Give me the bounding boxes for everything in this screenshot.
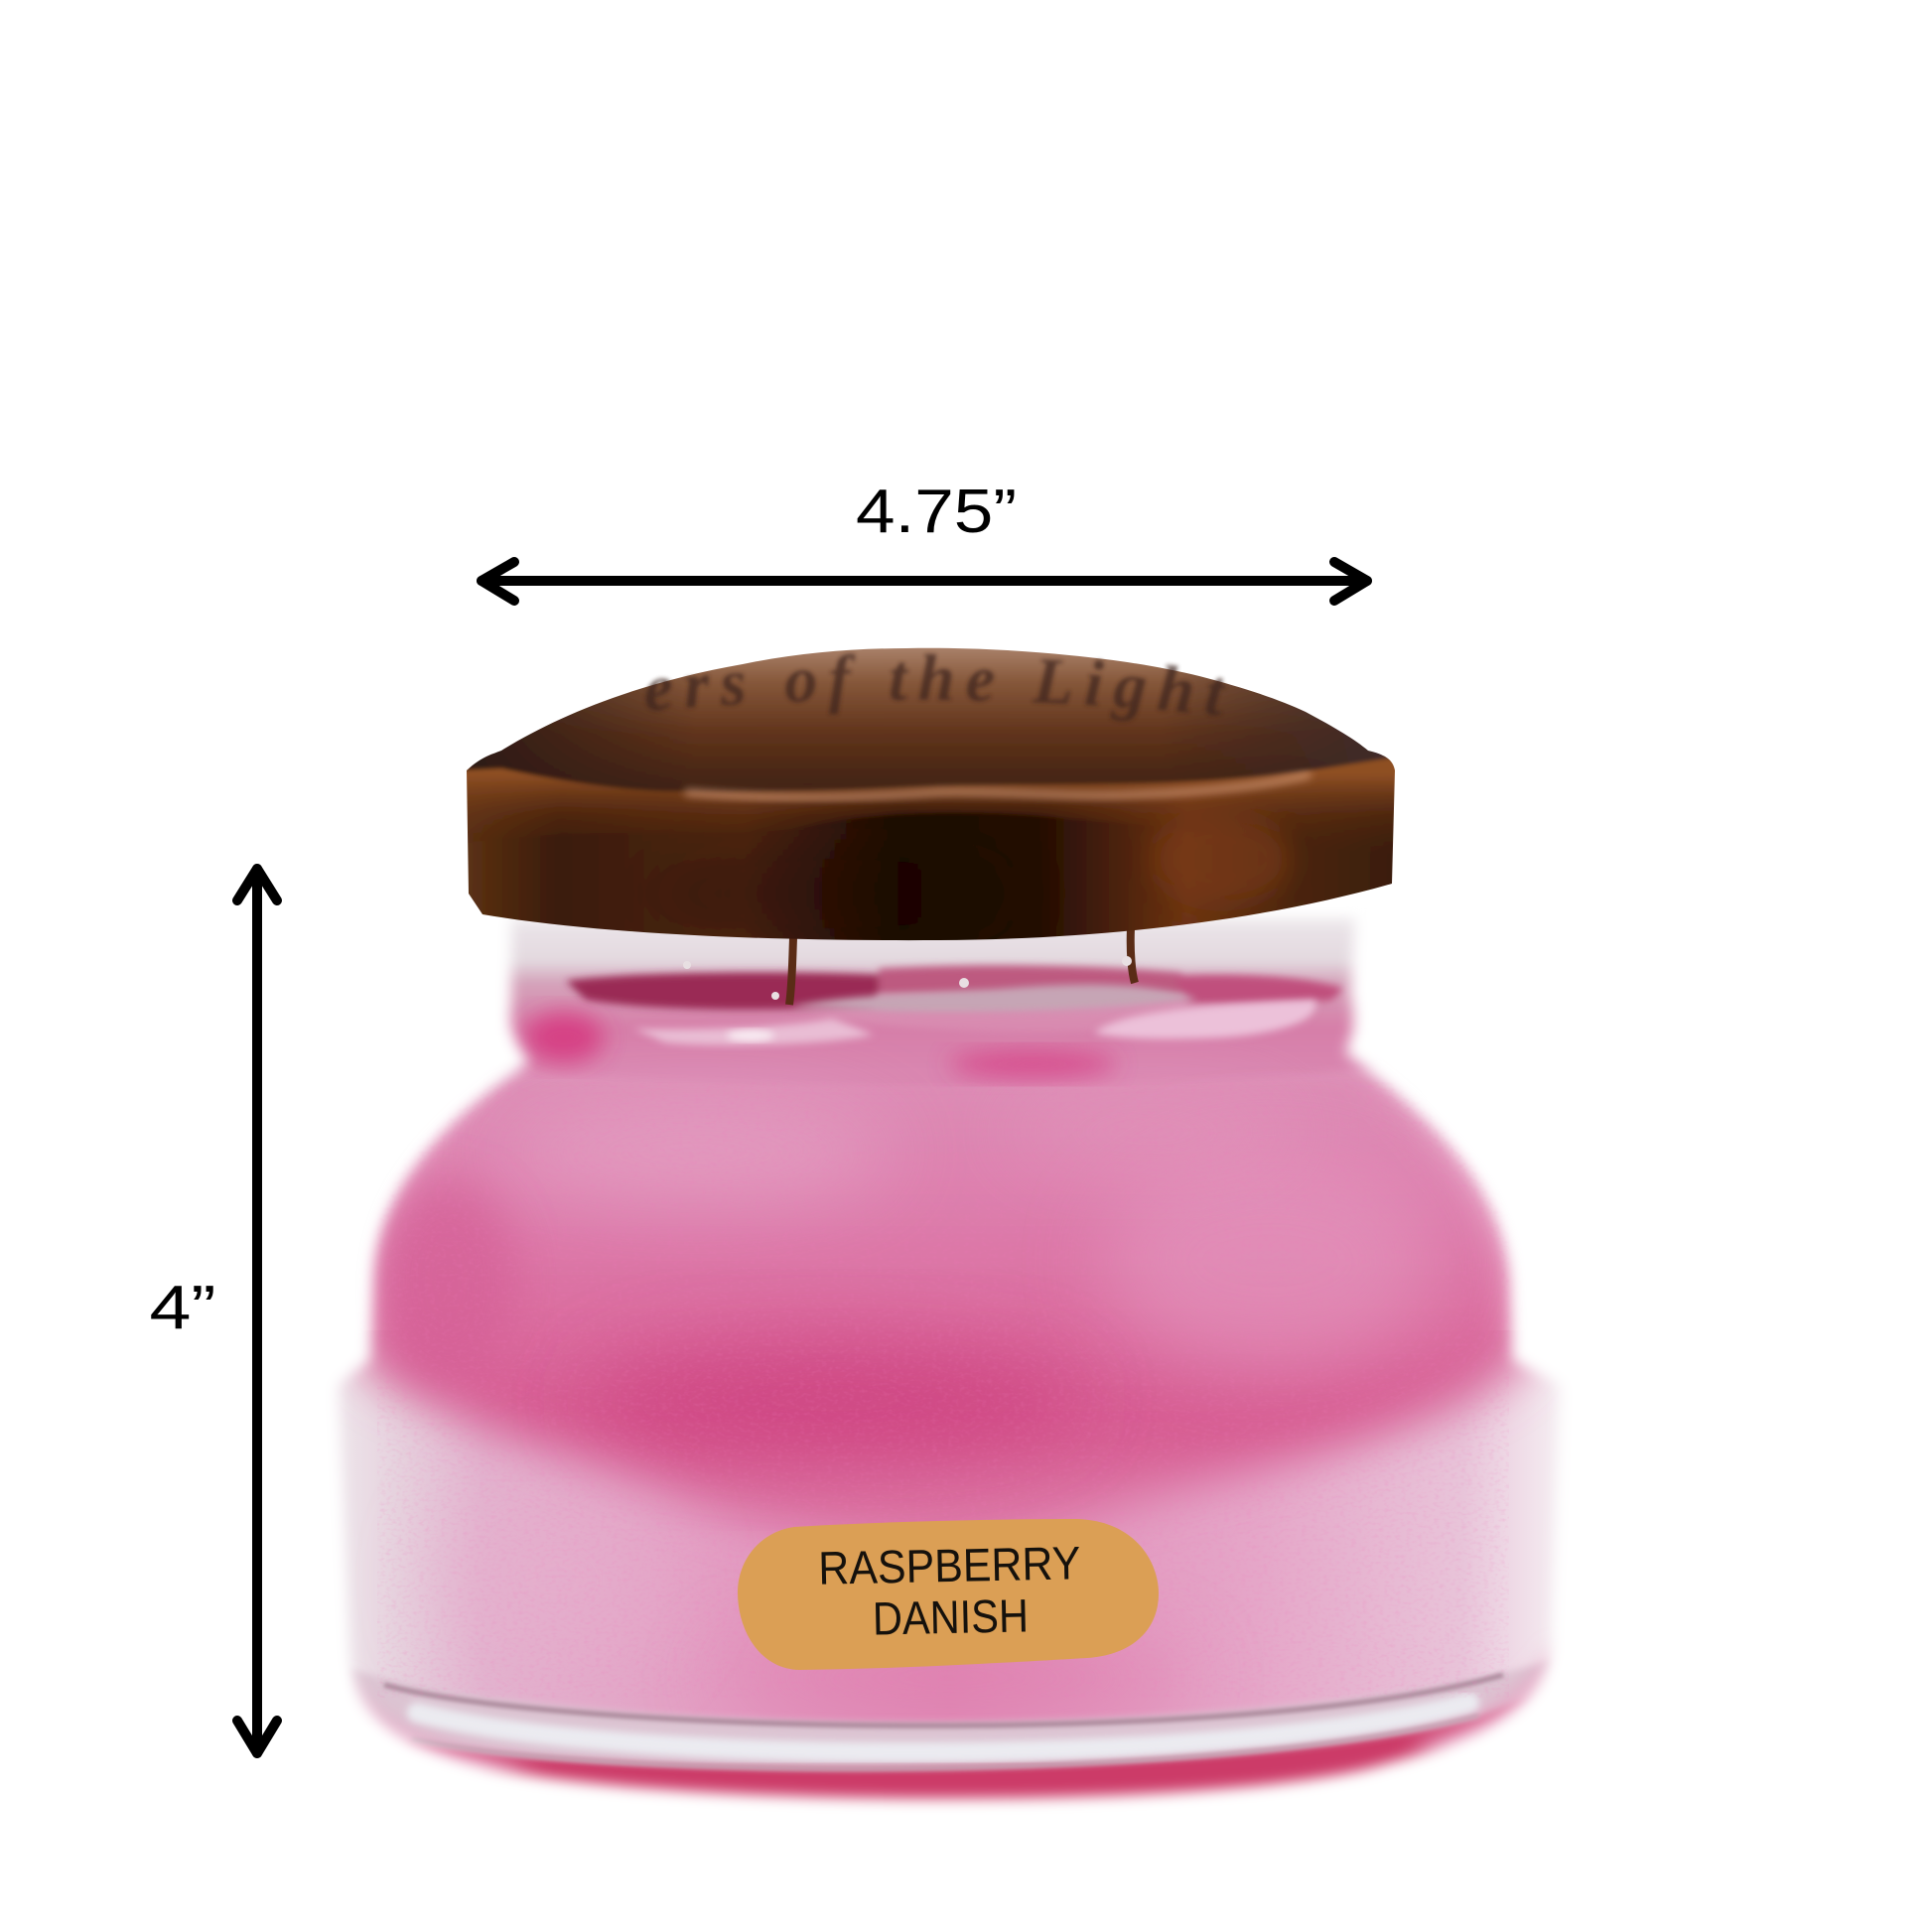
label text: DANISH bbox=[872, 1588, 1029, 1645]
lid rim bbox=[467, 786, 1394, 941]
wax speckle texture bbox=[377, 1377, 1509, 1698]
label text: RASPBERRY bbox=[818, 1536, 1081, 1594]
glass neck and collar bbox=[501, 915, 1366, 1080]
wicks and droplets bbox=[683, 928, 1135, 1005]
lower pale body bbox=[336, 1335, 1561, 1725]
wax tonal patches bbox=[377, 1092, 1440, 1727]
lid engraving: ers of the Light bbox=[645, 651, 1227, 723]
width arrow bbox=[482, 562, 1367, 601]
magenta blots in collar bbox=[524, 1012, 604, 1063]
height arrow bbox=[237, 869, 277, 1753]
height label: 4” bbox=[149, 1274, 216, 1342]
red base reflection bbox=[415, 1701, 1520, 1809]
lid bbox=[467, 647, 1395, 941]
collar highlights bbox=[633, 1019, 874, 1045]
pale wax lump bbox=[791, 985, 1196, 1013]
glass base lines bbox=[384, 1675, 1503, 1725]
lid dome bbox=[469, 647, 1387, 796]
base glass bbox=[351, 1662, 1545, 1769]
dome of darker wax bbox=[357, 1033, 1529, 1536]
label sticker bbox=[738, 1519, 1159, 1670]
rim highlight bbox=[685, 774, 1311, 797]
dark wax surface bbox=[566, 966, 1344, 1010]
label text bbox=[818, 1536, 1082, 1646]
candle jar bbox=[318, 908, 1579, 1847]
width label: 4.75” bbox=[856, 478, 1017, 546]
product diagram: candle jar with dimensions bbox=[151, 489, 1561, 1809]
